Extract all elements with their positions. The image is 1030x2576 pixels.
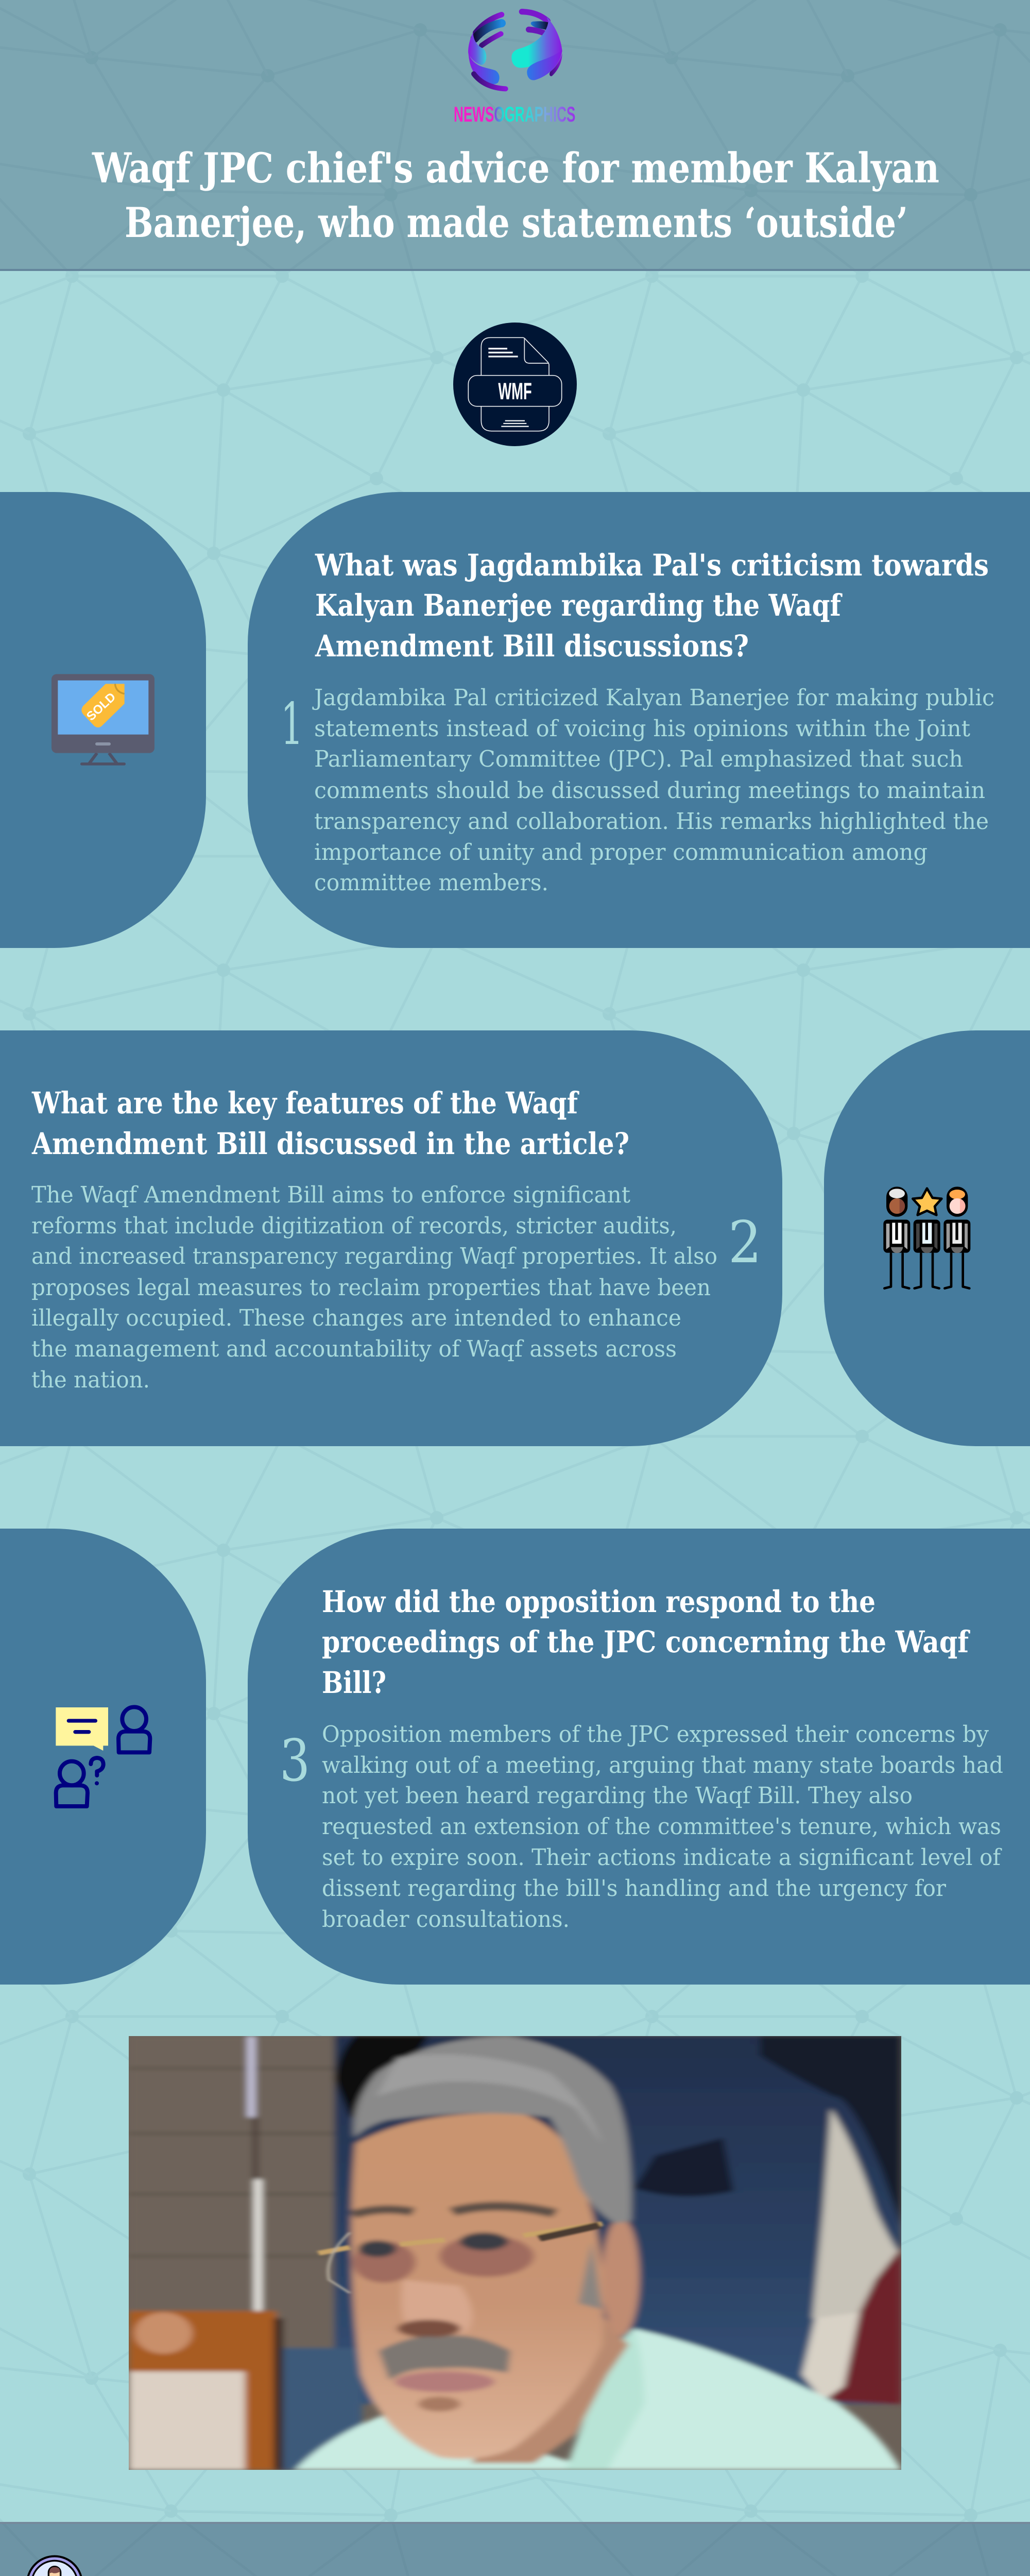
heading: question 2: Amendment Bill discussed in the article? [31,1126,629,1161]
heading: question 2 [31,1086,629,1161]
text block: answer 1: transparency and collaboration. His remarks highlighted the [314,808,989,835]
text block: answer 1: comments should be discussed during meetings to maintain [314,777,985,804]
wood panel [129,2311,277,2470]
number 3: 3 [280,1727,310,1794]
ear and neck [471,2315,628,2463]
logo: newsographics top [454,12,575,126]
panel: question 2 [0,1030,782,1446]
text block: answer 2: illegally occupied. These changes are intended to enhance [31,1305,681,1331]
text block: answer 3: set to expire soon. Their actions indicate a significant level of [322,1844,1002,1871]
shirt [295,2329,901,2470]
text block: answer 1: statements instead of voicing his opinions within the Joint [314,716,970,742]
hair [354,2036,631,2224]
heading: question 2: What are the key features of the Waqf [31,1086,579,1121]
person middle [914,1219,940,1289]
text block: answer 2 [31,1182,717,1393]
heading: question 3 [322,1584,971,1700]
panel: question 1 [248,492,1030,948]
text block: answer 3: walking out of a meeting, arguing that many state boards had [322,1752,1003,1778]
heading: question 3: Bill? [322,1665,386,1700]
person left [883,1187,910,1289]
mustache [379,2335,510,2380]
heading: question 1: Amendment Bill discussions? [315,629,749,664]
text block: answer 1: importance of unity and proper communication among [314,839,928,866]
title [92,144,939,247]
text block: answer 2: proposes legal measures to reclaim properties that have been [31,1275,711,1301]
face [351,2113,604,2459]
text block: answer 3: Opposition members of the JPC expressed their concerns by [322,1721,989,1748]
text block: answer 1: Parliamentary Committee (JPC). Pal emphasized that such [314,746,963,772]
text block: answer 1: committee members. [314,870,548,896]
text block: answer 3 [322,1721,1003,1933]
text block: answer 3: requested an extension of the committee's tenure, which was [322,1814,1001,1840]
number 1: 1 [281,691,303,758]
person right [943,1187,970,1289]
icon: monitor with sold tag: SOLD [84,690,118,723]
icon: magnifier with person [27,2556,96,2576]
suit of standing person [334,2036,901,2404]
red garment [828,2247,901,2404]
text block: answer 3: not yet been heard regarding the Waqf Bill. They also [322,1783,913,1809]
eye sockets [353,2241,416,2283]
text block: answer 3: broader consultations. [322,1906,570,1933]
heading: question 1: Kalyan Banerjee regarding the Waqf [315,588,843,623]
text block: answer 2: The Waqf Amendment Bill aims to enforce significant [31,1182,630,1208]
lips [394,2371,494,2392]
text block: answer 1 [312,685,994,896]
panel: question 3 [248,1529,1030,1985]
patterned wall [813,2108,901,2318]
wall [129,2036,360,2361]
footer band [0,2522,1030,2576]
icon: three people and star [883,1187,970,1289]
panel: question 1 icon [0,492,206,948]
number 2: 2 [728,1209,762,1276]
text block: answer 3: dissent regarding the bill's handling and the urgency for [322,1875,947,1902]
icon: WMF file: WMF [498,378,532,404]
icon: WMF file [453,323,577,446]
text block: answer 2: and increased transparency regarding Waqf properties. It also [31,1243,717,1269]
star [913,1189,941,1215]
icon: monitor with sold tag [52,674,154,766]
panel: question 3 icon [0,1529,206,1985]
heading: question 1 [315,548,989,664]
glasses [318,2224,602,2293]
text block: answer 2: the nation. [31,1367,150,1393]
text block: answer 1: Jagdambika Pal criticized Kalyan Banerjee for making public [312,685,994,711]
header band [0,0,1030,271]
icon: two people talking [56,1707,150,1806]
logo: newsographics top: NEWSOGRAPHICS [454,103,575,126]
text block: answer 2: reforms that include digitization of records, stricter audits, [31,1213,677,1239]
nose [401,2280,472,2333]
heading: question 3: How did the opposition respond to the [322,1584,876,1619]
photo: Kalyan Banerjee portrait [129,2036,901,2470]
text block: answer 2: the management and accountability of Waqf assets across [31,1336,677,1362]
eyebrows [353,2210,413,2215]
panel: question 2 icon [824,1030,1030,1446]
